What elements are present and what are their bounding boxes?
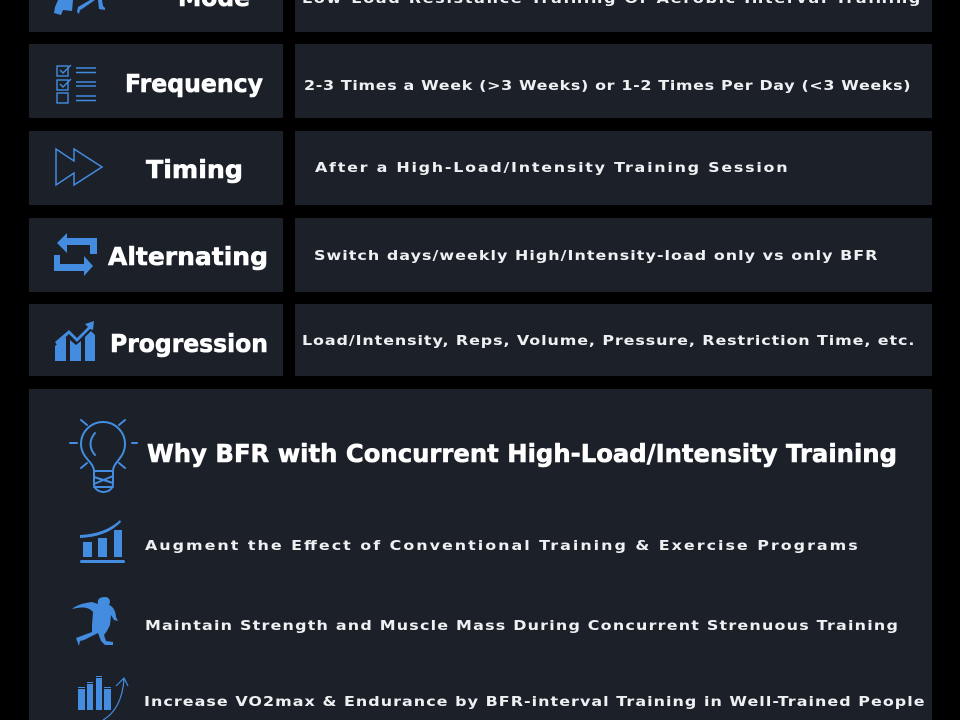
heading: Frequency: Frequency (125, 69, 263, 98)
icon: growth chart (55, 321, 95, 361)
icon: swap arrows (54, 233, 97, 276)
row: Alternating (29, 218, 932, 292)
text: benefit 1: Augment the Effect of Conventional Training & Exercise Programs (145, 538, 858, 554)
icon: rising bars (78, 676, 128, 720)
panel: why BFR (29, 389, 932, 720)
row: Progression (29, 304, 932, 376)
icon: light bulb (70, 420, 137, 492)
icon: bar chart (80, 520, 125, 563)
text: benefit 3: Increase VO2max & Endurance by BFR-interval Training in Well-Trained People (144, 694, 925, 710)
text: progression detail: Load/Intensity, Reps, Volume, Pressure, Restriction Time, etc. (302, 333, 914, 349)
icon: fast forward (56, 149, 102, 185)
heading: Progression: Progression (110, 329, 268, 358)
text: frequency detail: 2-3 Times a Week (>3 Weeks) or 1-2 Times Per Day (<3 Weeks) (304, 78, 911, 94)
text: alternating detail: Switch days/weekly High/Intensity-load only vs only BFR (314, 248, 878, 264)
row: Frequency (29, 44, 932, 118)
row: Mode (29, 0, 932, 32)
icon: exercise figure (54, 0, 105, 15)
icon: checklist (57, 65, 96, 103)
text: timing detail: After a High-Load/Intensity Training Session (315, 160, 788, 176)
heading: Timing: Timing (146, 155, 243, 184)
icon: runner (72, 597, 118, 646)
row: Timing (29, 131, 932, 205)
heading: why BFR: Why BFR with Concurrent High-Load/Intensity Training (147, 439, 897, 468)
heading: Alternating: Alternating (108, 242, 268, 271)
text: benefit 2: Maintain Strength and Muscle Mass During Concurrent Strenuous Training (145, 618, 898, 634)
